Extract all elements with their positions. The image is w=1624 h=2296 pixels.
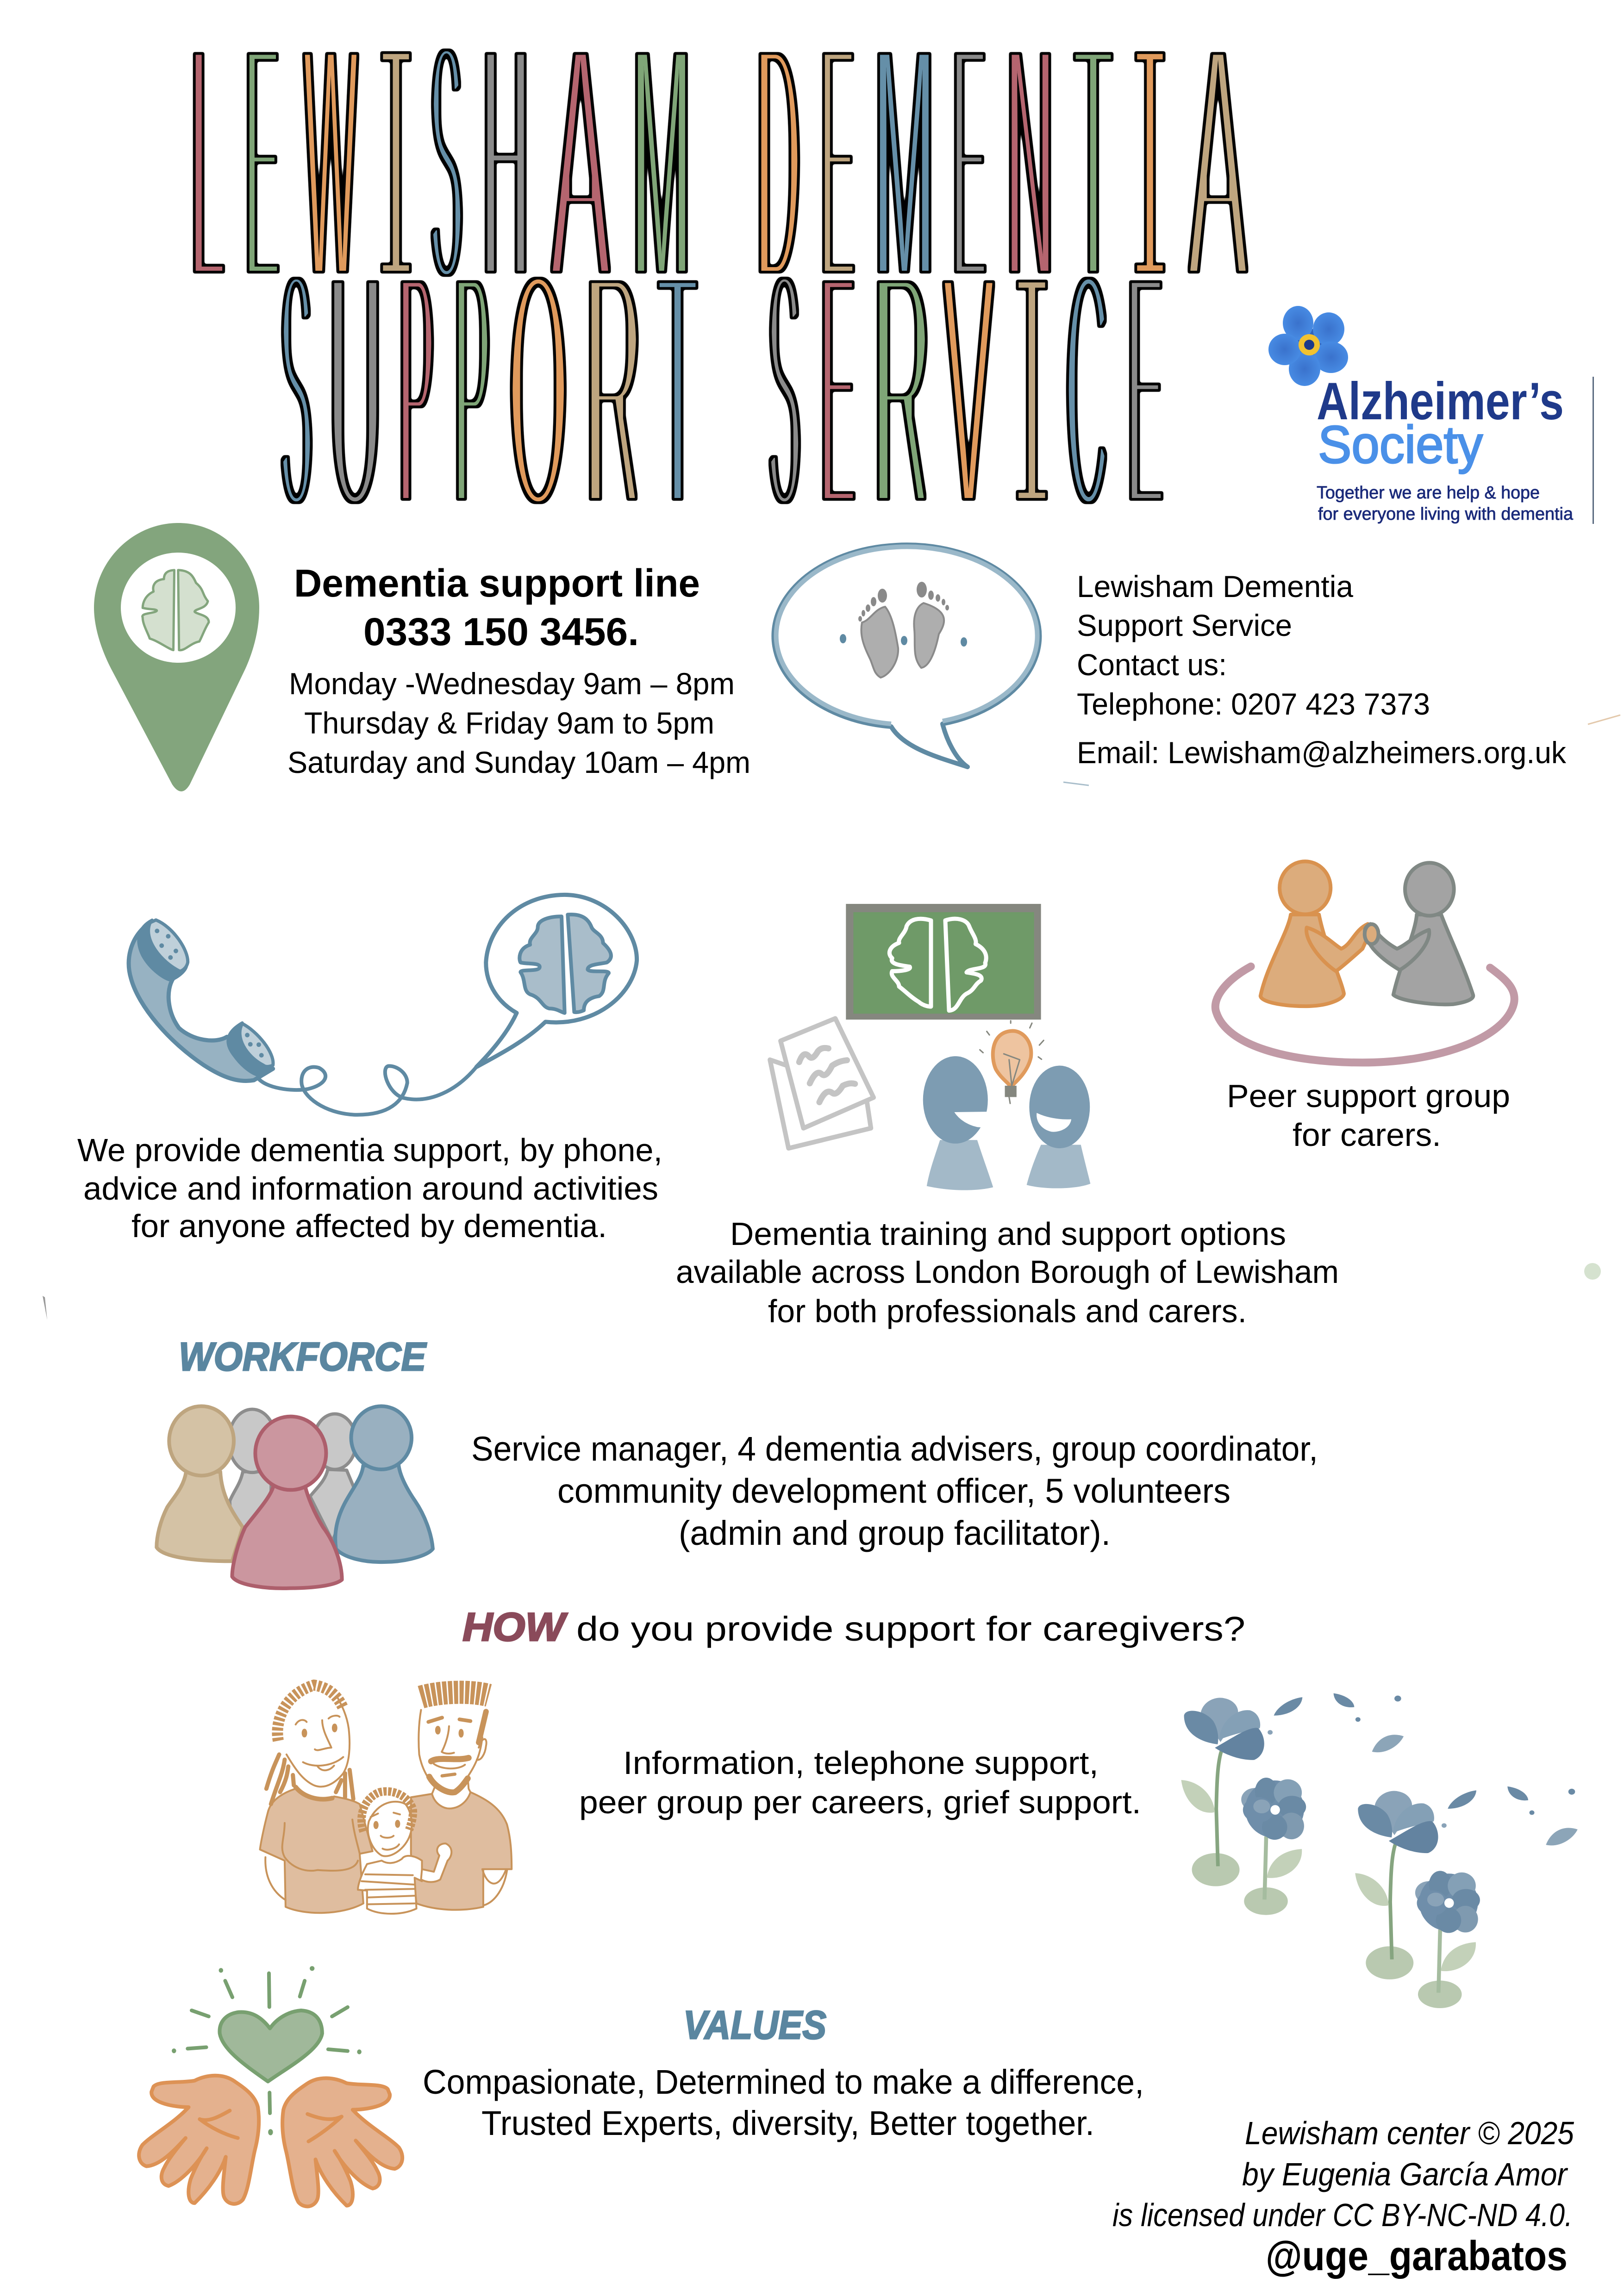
title line 2: Support Service: C (1066, 197, 1108, 583)
icon: telephone with brain speech bubble (129, 895, 637, 1115)
contact details: Contact us: (1077, 647, 1227, 682)
title (191, 0, 1249, 618)
falling petals 2 (1442, 1786, 1578, 1846)
mother (260, 1685, 373, 1913)
illustration: family (260, 1685, 512, 1914)
figure: right person talking (1027, 1066, 1090, 1188)
title line 2: Support Service: I (1012, 209, 1051, 618)
title line 2: Support Service: P (399, 197, 434, 582)
contact details: Lewisham Dementia (1077, 569, 1353, 604)
child (358, 1792, 451, 1914)
figure: left person talking (923, 1056, 993, 1190)
contact details (1077, 569, 1567, 770)
illustration: peer support figures holding hands in circle (1215, 861, 1514, 1063)
text: workforce description: (admin and group facilitator). (679, 1514, 1111, 1552)
opening hours (287, 666, 750, 779)
text: values description: Compasionate, Determined to make a difference, (423, 2063, 1144, 2101)
icon: chalkboard with brain (846, 904, 1041, 1020)
heading: how do you provide support (462, 1605, 1245, 1649)
text: workforce description (471, 1430, 1318, 1552)
father (411, 1692, 512, 1910)
orange figure (1261, 861, 1370, 1006)
heading: values: VALUES (683, 2003, 826, 2047)
heading: how do you provide support: do you provide support for caregivers? (576, 1610, 1245, 1648)
peer ring (1215, 966, 1514, 1063)
opening hours: Thursday & Friday 9am to 5pm (304, 706, 714, 740)
title line 2: Support Service: R (873, 197, 931, 582)
flower group 2 (1355, 1791, 1480, 2008)
title line 2: Support Service: R (586, 198, 642, 583)
text: peer support group (1227, 1078, 1510, 1153)
text: phone support: We provide dementia support, by phone, (77, 1132, 662, 1168)
text: phone support (77, 1132, 662, 1244)
title line 1: Lewisham Dementia (191, 0, 1249, 391)
title line 2: Support Service: E (1128, 197, 1162, 582)
text: caregiver support (579, 1745, 1141, 1820)
text: phone support: advice and information around activities (83, 1170, 658, 1207)
dementia support line: 0333 150 3456. (363, 610, 639, 653)
icon: hands holding a heart (139, 1966, 402, 2206)
text: peer support group: for carers. (1293, 1117, 1441, 1153)
title line 2: Support Service: P (455, 197, 490, 582)
text: dementia training: available across London Borough of Lewisham (676, 1254, 1339, 1290)
logo tagline (1317, 483, 1574, 524)
social handle: @uge_garabatos (1266, 2233, 1568, 2279)
text: caregiver support: peer group per careers, grief support. (579, 1784, 1141, 1820)
logo tagline: for everyone living with dementia (1318, 504, 1574, 524)
credits: by Eugenia García Amor (1242, 2156, 1568, 2192)
text: workforce description: Service manager, 4 dementia advisers, group coordinator, (471, 1430, 1318, 1468)
text: values description (423, 2063, 1144, 2142)
contact details: Telephone: 0207 423 7373 (1077, 687, 1430, 721)
title line 2: Support Service (280, 197, 1162, 618)
text: values description: Trusted Experts, diversity, Better together. (481, 2104, 1094, 2142)
right hand (282, 2078, 402, 2206)
icon: papers (770, 1019, 874, 1148)
title line 2: Support Service: O (509, 198, 567, 583)
Alzheimer's Society logo (1268, 306, 1594, 524)
credits (1112, 2115, 1574, 2279)
heading: how do you provide support: HOW (462, 1605, 568, 1649)
contact details: Email: Lewisham@alzheimers.org.uk (1077, 735, 1567, 770)
title line 2: Support Service: T (658, 198, 697, 583)
title line 2: Support Service: E (821, 197, 855, 582)
title line 2: Support Service: S (280, 197, 312, 582)
grey figure (1365, 863, 1473, 1004)
text: caregiver support: Information, telephone support, (623, 1745, 1099, 1781)
icon: map pin with brain (94, 523, 259, 791)
logo tagline: Together we are help & hope (1317, 483, 1540, 503)
icon: light bulb (980, 1021, 1043, 1103)
speech bubble with footprints (774, 545, 1039, 767)
logo wordmark Alzheimer's: Alzheimer’s (1317, 372, 1564, 431)
credits: Lewisham center © 2025 (1245, 2115, 1574, 2151)
heading: workforce: WORKFORCE (179, 1335, 427, 1379)
icon: footprints (858, 582, 949, 678)
dementia support line: Dementia support line (294, 561, 700, 605)
illustration: flowers and petals (1181, 1693, 1578, 2008)
opening hours: Saturday and Sunday 10am – 4pm (287, 745, 750, 779)
illustration: training board, papers and people (770, 904, 1090, 1190)
text: workforce description: community development officer, 5 volunteers (557, 1472, 1230, 1510)
icon: forget-me-not flower (1268, 306, 1348, 386)
opening hours: Monday -Wednesday 9am – 8pm (289, 666, 735, 701)
title line 2: Support Service: U (329, 198, 382, 583)
text: dementia training: Dementia training and support options (730, 1216, 1286, 1252)
falling petals 1 (1268, 1693, 1404, 1752)
text: peer support group: Peer support group (1227, 1078, 1510, 1114)
left hand (139, 2076, 259, 2204)
icon: workforce pawn figures (156, 1406, 433, 1588)
flower group 1 (1181, 1698, 1306, 1915)
text: phone support: for anyone affected by dementia. (131, 1208, 607, 1244)
contact details: Support Service (1077, 608, 1292, 642)
logo wordmark Society: Society (1318, 416, 1483, 474)
title line 2: Support Service: S (768, 197, 800, 582)
text: dementia training: for both professionals and carers. (768, 1293, 1247, 1329)
text: dementia training (676, 1216, 1339, 1329)
title line 2: Support Service: V (943, 198, 995, 583)
dementia support line (294, 561, 700, 653)
heart with rays (172, 1966, 362, 2135)
credits: is licensed under CC BY-NC-ND 4.0. (1112, 2197, 1573, 2233)
